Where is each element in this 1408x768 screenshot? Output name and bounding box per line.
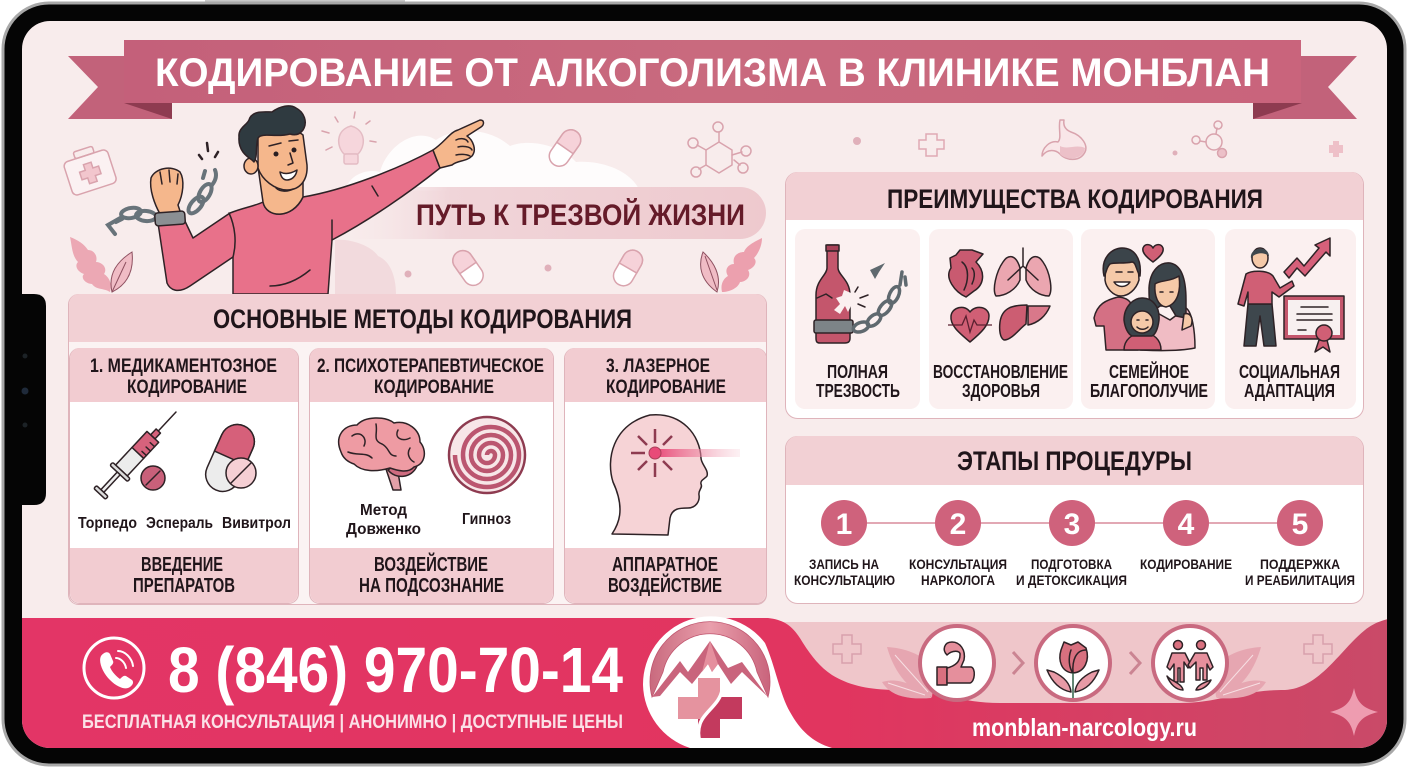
card footer: НА ПОДСОЗНАНИЕ [359,575,504,597]
icon: molecule right [1192,121,1226,158]
card heading [317,356,544,398]
card footer: ВОЗДЕЙСТВИЕ [374,552,488,576]
footer band [22,616,1388,748]
label: БЛАГОПОЛУЧИЕ [1090,381,1208,401]
panel: coding methods [68,294,766,604]
icon: head with laser [610,415,740,535]
steps heading: ЭТАПЫ ПРОЦЕДУРЫ [957,446,1192,476]
method labels: Довженко [346,521,421,538]
step 1: ЗАПИСЬ НА [809,556,879,572]
chevron [1130,652,1140,674]
drug labels: Эспераль [146,515,213,532]
break sparks [199,143,218,159]
step 1: 1 [836,508,852,541]
card: health [929,229,1073,409]
icon: plus left [833,635,861,663]
card: laser [564,348,766,604]
title ribbon [68,40,1357,119]
raised fist [151,168,183,214]
slogan pill [399,187,766,239]
icon: lungs [994,248,1051,296]
icon: leaves right [701,238,762,292]
card heading: 3. ЛАЗЕРНОЕ [606,356,710,377]
card heading: КОДИРОВАНИЕ [374,377,494,398]
step 5: И РЕАБИЛИТАЦИЯ [1245,572,1355,588]
step 5: 5 [1292,508,1308,541]
icon: plus right [1304,635,1332,663]
chevron [1013,652,1023,674]
label: АДАПТАЦИЯ [1244,381,1335,401]
icon: shackle [155,211,185,226]
panel: procedure steps [786,436,1364,604]
methods heading: ОСНОВНЫЕ МЕТОДЫ КОДИРОВАНИЯ [213,304,632,334]
benefits heading: ПРЕИМУЩЕСТВА КОДИРОВАНИЯ [887,184,1263,214]
phone number: 8 (846) 970-70-14 [168,634,623,706]
drug labels [78,517,290,532]
step 4: КОДИРОВАНИЕ [1140,556,1232,572]
tablet side notch [22,294,46,505]
card footer [134,557,234,592]
icon: sparkle [1330,688,1378,736]
card: psychotherapy [310,348,554,604]
card: social [1225,229,1356,409]
step 2: 2 [950,508,966,541]
icon: capsule [204,424,256,492]
step 5 [1245,500,1355,588]
step 3: И ДЕТОКСИКАЦИЯ [1016,572,1127,588]
card: family [1081,229,1215,409]
method labels: Метод [360,502,407,519]
icon: ecg heart [948,307,992,342]
icon: hypnosis spiral [449,417,525,493]
label: ТРЕЗВОСТЬ [816,381,900,401]
website url: monblan-narcology.ru [972,714,1197,742]
card footer: ВВЕДЕНИЕ [141,554,223,576]
card: sobriety [795,229,920,409]
label: ВОССТАНОВЛЕНИЕ [933,362,1068,382]
card heading [606,356,726,398]
circle: two people [1153,626,1227,700]
icon: leaves left [70,237,132,292]
icon: first aid kit [64,146,117,196]
step 2: НАРКОЛОГА [921,572,995,588]
neck and head [258,167,303,214]
icon: round pill [226,458,256,488]
step 2: КОНСУЛЬТАЦИЯ [909,556,1007,572]
drug labels: Вивитрол [222,515,291,532]
card footer: АППАРАТНОЕ [612,554,718,576]
pointing hand [433,120,484,168]
icon: heart organ [949,250,983,297]
icon: tablet [141,466,165,490]
card heading: КОДИРОВАНИЕ [127,377,247,398]
icon: brain [339,418,424,490]
icon: phone [84,638,144,698]
label: ПОЛНАЯ [827,362,888,382]
card footer: ВОЗДЕЙСТВИЕ [608,573,722,597]
icon: broken bottle and chain [814,245,906,343]
icon: leaves left of circles [882,647,935,698]
footer tagline: БЕСПЛАТНАЯ КОНСУЛЬТАЦИЯ | АНОНИМНО | ДОСТУПНЫЕ ЦЕНЫ [82,712,623,733]
label: СЕМЕЙНОЕ [1109,361,1189,382]
illustration: man breaking chains [108,106,484,294]
logo [643,616,832,748]
card heading: 1. МЕДИКАМЕНТОЗНОЕ [90,356,277,377]
card heading [90,356,277,398]
icon: man with growth arrow and diploma [1238,238,1344,352]
label [1090,361,1208,401]
card footer [608,554,722,597]
card heading: КОДИРОВАНИЕ [606,377,726,398]
icon: stomach [1042,120,1086,159]
shirt [158,150,440,294]
step 3: 3 [1064,508,1080,541]
step 2 [909,500,1007,588]
step 1: КОНСУЛЬТАЦИЮ [794,572,895,588]
icon: molecule left [688,122,751,177]
step 1 [794,500,895,588]
circle: thumbs up [920,626,994,700]
circle: tulip in hands [1036,626,1110,700]
card heading: 2. ПСИХОТЕРАПЕВТИЧЕСКОЕ [317,356,544,377]
dot [853,137,861,145]
step 5: ПОДДЕРЖКА [1260,556,1340,572]
icon: syringe [94,411,177,500]
label: ЗДОРОВЬЯ [962,381,1040,401]
label [816,362,900,401]
icon: plus [919,134,944,156]
card: medication [70,348,298,604]
icon: light bulb [322,112,376,164]
title: КОДИРОВАНИЕ ОТ АЛКОГОЛИЗМА В КЛИНИКЕ МОНБЛАН [155,51,1270,95]
icon: small plus right [1329,141,1343,157]
card footer [359,552,504,597]
label [1239,362,1340,401]
icon: leaves right of circles [1213,647,1266,698]
card footer: ПРЕПАРАТОВ [133,575,235,597]
slogan text: ПУТЬ К ТРЕЗВОЙ ЖИЗНИ [416,198,745,232]
icon: chain [108,170,216,234]
label [933,362,1068,401]
icon: family [1094,245,1195,351]
step 4: 4 [1178,508,1195,541]
step 3: ПОДГОТОВКА [1031,556,1112,572]
step 4 [1140,500,1232,572]
step 3 [1016,500,1127,588]
decorative medical icons [61,112,1343,294]
method labels: Гипноз [462,511,511,528]
icon: liver [1000,305,1050,340]
drug labels: Торпедо [78,515,137,532]
label: СОЦИАЛЬНАЯ [1239,362,1340,382]
panel: benefits [786,172,1364,418]
method labels [346,502,511,538]
icon: capsule top [548,129,582,167]
icon: capsules lower [452,250,484,286]
